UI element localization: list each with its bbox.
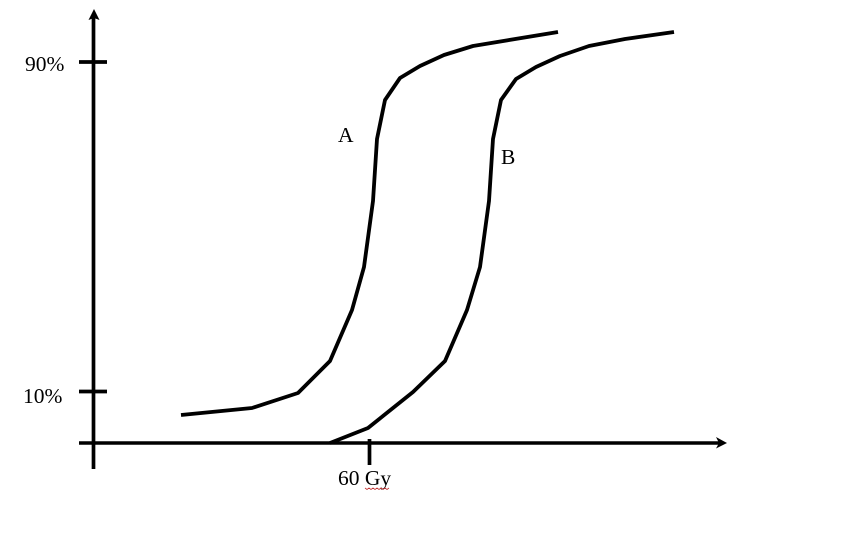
y tick: 10% (23, 384, 107, 408)
x tick: 60 Gy (338, 439, 391, 490)
y tick: 90%: 90% (25, 52, 64, 76)
curve A (181, 32, 558, 415)
x axis with arrow (79, 437, 727, 448)
label A: A (338, 123, 354, 147)
label B: B (501, 145, 515, 169)
curve B (330, 32, 674, 443)
y tick: 90% (25, 52, 107, 76)
y axis with arrow (88, 9, 100, 469)
x tick: 60 Gy: 60 Gy (338, 466, 391, 490)
y tick: 10%: 10% (23, 384, 62, 408)
